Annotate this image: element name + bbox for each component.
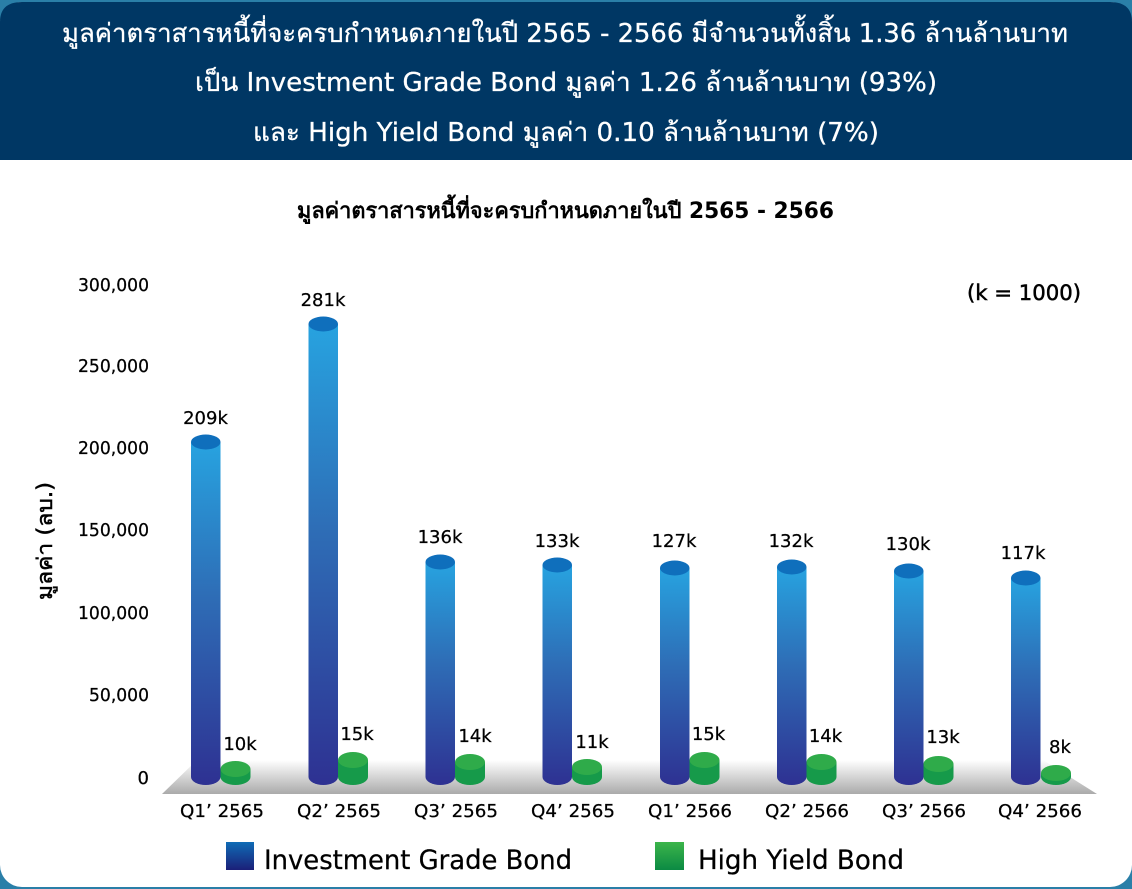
value labels: High Yield Bond — [223, 724, 1072, 758]
value labels: High Yield Bond: 10k — [223, 734, 257, 755]
x axis labels: Q2’ 2565 — [297, 801, 381, 822]
value labels: Investment Grade Bond: 117k — [1001, 543, 1046, 564]
value labels: Investment Grade Bond: 127k — [652, 531, 697, 552]
y axis labels: 100,000 — [78, 603, 149, 624]
header line 2: เป็น Investment Grade Bond มูลค่า 1.26 ล้านล้านบาท (93%) — [195, 66, 937, 98]
y axis labels: 150,000 — [78, 520, 149, 541]
green bar Q3 2566 — [924, 756, 954, 785]
value labels: High Yield Bond: 11k — [575, 732, 609, 753]
value labels: High Yield Bond: 15k — [692, 724, 726, 745]
value labels: Investment Grade Bond — [183, 290, 1046, 564]
bar Q4 2565 — [542, 558, 572, 785]
x axis labels: Q4’ 2566 — [998, 801, 1082, 822]
chart title: มูลค่าตราสารหนี้ที่จะครบกำหนดภายในปี 2565 - 2566 — [297, 194, 834, 225]
bar Q1 2565 — [191, 434, 220, 785]
green bar Q3 2565 — [455, 754, 485, 785]
value labels: Investment Grade Bond: 136k — [418, 527, 463, 548]
x axis labels: Q2’ 2566 — [765, 801, 849, 822]
y axis title: มูลค่า (ลบ.) — [33, 482, 58, 600]
header line 3: และ High Yield Bond มูลค่า 0.10 ล้านล้านบาท (7%) — [253, 118, 879, 148]
value labels: Investment Grade Bond: 130k — [886, 534, 931, 555]
bars: Investment Grade Bond — [191, 316, 1040, 785]
y axis labels: 300,000 — [78, 275, 149, 296]
value labels: High Yield Bond: 13k — [926, 727, 960, 748]
y axis labels: 200,000 — [78, 438, 149, 459]
y axis labels: 50,000 — [89, 685, 149, 706]
value labels: High Yield Bond: 14k — [458, 726, 492, 747]
x axis labels: Q4’ 2565 — [531, 801, 615, 822]
chart floor — [162, 760, 1097, 794]
y axis labels: 0 — [138, 768, 149, 789]
bars: High Yield Bond — [220, 752, 1071, 785]
bar Q2 2565 — [308, 316, 338, 785]
bar Q1 2566 — [660, 560, 690, 785]
value labels: High Yield Bond: 14k — [809, 726, 843, 747]
scale note: (k = 1000) — [967, 281, 1081, 305]
value labels: Investment Grade Bond: 132k — [769, 531, 814, 552]
x axis labels — [180, 801, 1082, 822]
green bar Q2 2566 — [806, 754, 836, 785]
x axis labels: Q3’ 2565 — [414, 801, 498, 822]
header line 1: มูลค่าตราสารหนี้ที่จะครบกำหนดภายในปี 2565 - 2566 มีจำนวนทั้งสิ้น 1.36 ล้านล้านบาท — [62, 14, 1068, 49]
value labels: Investment Grade Bond: 209k — [183, 408, 228, 429]
x axis labels: Q1’ 2566 — [648, 801, 732, 822]
value labels: High Yield Bond: 8k — [1049, 737, 1072, 758]
value labels: High Yield Bond: 15k — [340, 724, 374, 745]
y axis labels — [78, 275, 149, 789]
green bar Q1 2565 — [220, 761, 250, 785]
green bar Q1 2566 — [690, 752, 720, 785]
green bar Q4 2565 — [572, 759, 602, 785]
bar Q4 2566 — [1011, 570, 1040, 785]
x axis labels: Q1’ 2565 — [180, 801, 264, 822]
value labels: Investment Grade Bond: 281k — [301, 290, 346, 311]
legend: High Yield Bond: High Yield Bond — [698, 845, 904, 876]
bar Q2 2566 — [777, 560, 806, 785]
header banner — [0, 2, 1132, 160]
green bar Q2 2565 — [338, 752, 368, 785]
bar Q3 2565 — [426, 554, 455, 785]
green bar Q4 2566 — [1041, 765, 1071, 785]
bar Q3 2566 — [894, 564, 924, 785]
legend: Investment Grade Bond: Investment Grade Bond — [264, 845, 572, 876]
value labels: Investment Grade Bond: 133k — [535, 531, 580, 552]
y axis labels: 250,000 — [78, 356, 149, 377]
x axis labels: Q3’ 2566 — [882, 801, 966, 822]
